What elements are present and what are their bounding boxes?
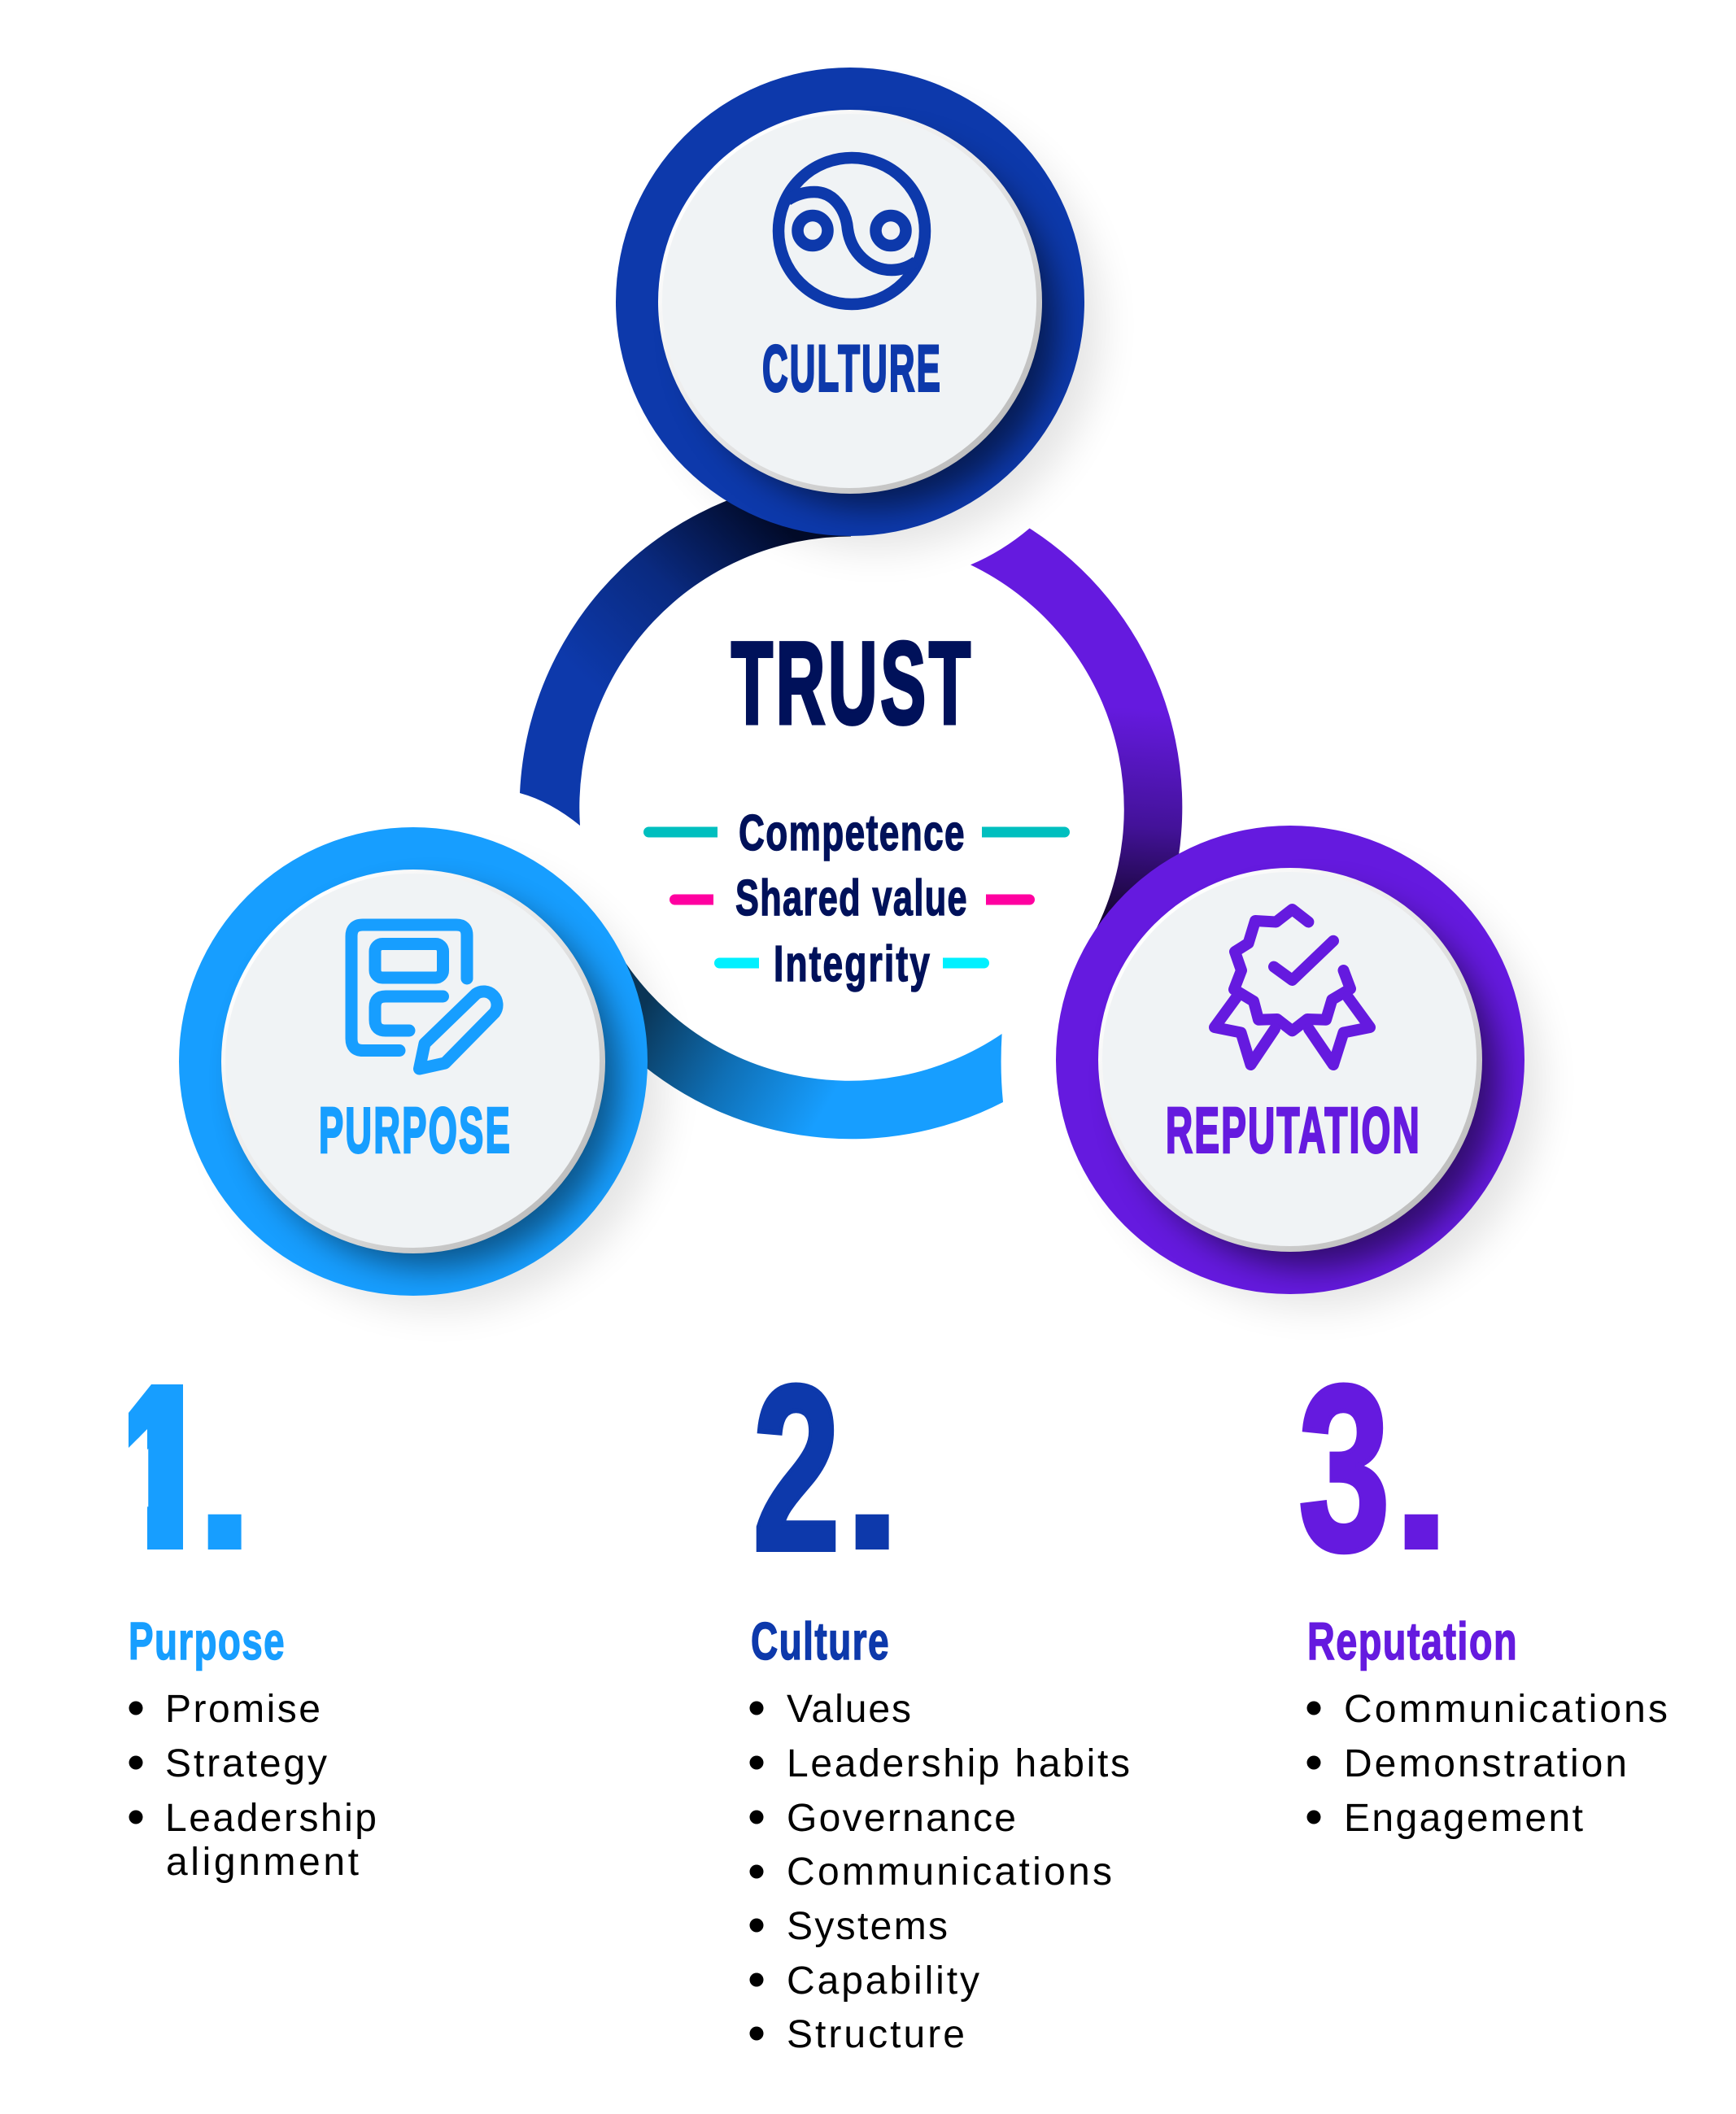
bullet list: culture: Capability — [787, 1959, 979, 2003]
number 1: 1 — [129, 1336, 198, 1600]
bullet list: purpose: Strategy — [165, 1742, 327, 1785]
bullet list: reputation: Demonstration — [1344, 1742, 1627, 1785]
label: purpose: PURPOSE — [319, 1093, 512, 1166]
number 3: . — [1389, 1336, 1455, 1600]
bullet list: purpose: Promise — [165, 1688, 321, 1731]
bullet list: culture: Systems — [787, 1905, 948, 1948]
heading: reputation: Reputation — [1307, 1611, 1518, 1671]
icon: document and pencil — [351, 925, 497, 1069]
bullet list: reputation: Engagement — [1344, 1797, 1583, 1840]
number 1: . — [192, 1336, 258, 1600]
bullet list: reputation — [1306, 1688, 1668, 1840]
bullet list: culture: Values — [787, 1688, 911, 1731]
text block: shared value with dashes: Shared value — [735, 870, 968, 926]
panel: culture circle — [616, 68, 1084, 536]
icon: yin-yang culture — [779, 158, 925, 304]
column 3: reputation list — [1298, 1336, 1668, 1840]
arc: reputation ring segment — [971, 529, 1182, 944]
bullet list: reputation: Communications — [1344, 1688, 1668, 1731]
bullet list: purpose: Leadership — [165, 1797, 377, 1840]
title: trust: TRUST — [731, 619, 974, 748]
bullet list: culture — [750, 1688, 1130, 2056]
number 2: . — [840, 1336, 905, 1600]
column 2: culture list — [750, 1336, 1130, 2056]
panel: purpose circle — [179, 827, 648, 1296]
label: culture: CULTURE — [762, 332, 942, 405]
bullet list: culture: Governance — [787, 1797, 1016, 1840]
bullet list: culture: Structure — [787, 2013, 965, 2056]
text block: competence with dashes: Competence — [739, 805, 966, 861]
number 3: 3 — [1298, 1336, 1390, 1600]
arc: purpose ring segment — [616, 948, 1003, 1139]
bullet list: purpose: alignment — [166, 1841, 359, 1884]
label: reputation: REPUTATION — [1166, 1093, 1421, 1166]
heading: culture: Culture — [751, 1611, 890, 1671]
outer soft shadows of the three circles — [216, 101, 1542, 1310]
bullet list: culture: Leadership habits — [787, 1742, 1130, 1785]
number 2: 2 — [752, 1336, 840, 1600]
icon: award rosette with check — [1215, 909, 1370, 1065]
bullet list: culture: Communications — [787, 1850, 1112, 1894]
heading: purpose: Purpose — [129, 1611, 286, 1671]
arc: culture ring segment — [520, 477, 851, 826]
column 1: purpose list — [129, 1336, 377, 1884]
bullet list: purpose — [129, 1688, 377, 1884]
number 1 — [129, 1384, 242, 1550]
panel: reputation circle — [1056, 826, 1524, 1294]
text block: integrity with dashes: Integrity — [774, 936, 931, 992]
